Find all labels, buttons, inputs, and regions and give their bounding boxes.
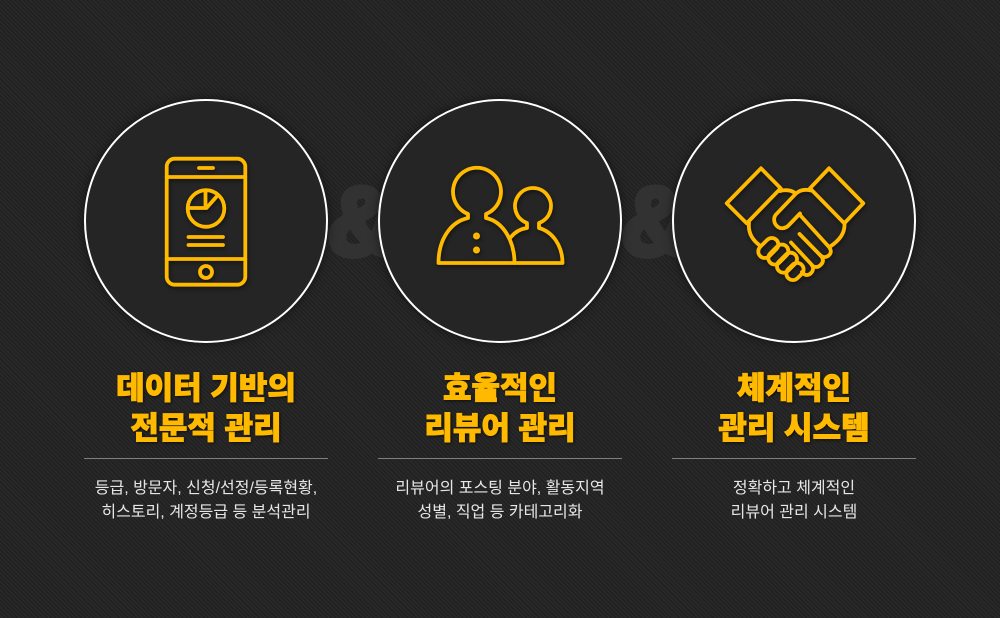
text: data based description: 등급, 방문자, 신청/선정/등록현황,	[95, 480, 317, 497]
panel: data based	[84, 371, 328, 521]
text: efficient review description: 성별, 직업 등 카테고리화	[418, 504, 582, 521]
heading: data based: 데이터 기반의	[116, 371, 296, 406]
heading: systematic	[718, 371, 870, 446]
ampersand: second: &	[621, 167, 691, 276]
circle: phone icon	[84, 99, 328, 343]
heading: systematic: 체계적인	[737, 371, 851, 406]
heading: systematic: 관리 시스템	[718, 411, 870, 446]
ampersand: first: &	[327, 167, 397, 276]
icon: phone with pie chart	[164, 156, 248, 289]
circle: handshake icon	[672, 99, 916, 343]
text: systematic description: 정확하고 체계적인	[733, 480, 855, 497]
text: systematic description: 리뷰어 관리 시스템	[731, 504, 857, 521]
text: data based description: 히스토리, 계정등급 등 분석관리	[101, 504, 311, 521]
text: data based description	[95, 480, 317, 521]
panel: efficient review	[378, 371, 622, 521]
text: systematic description	[731, 480, 857, 521]
heading: efficient review: 효율적인	[443, 371, 557, 406]
heading: data based: 전문적 관리	[130, 411, 282, 446]
text: efficient review description: 리뷰어의 포스팅 분야, 활동지역	[395, 480, 605, 497]
heading: data based	[116, 371, 296, 446]
text: efficient review description	[395, 479, 605, 521]
icon: two people	[436, 166, 566, 267]
icon: handshake	[724, 166, 866, 284]
heading: efficient review: 리뷰어 관리	[424, 411, 576, 446]
panel: systematic	[672, 371, 916, 521]
heading: efficient review	[424, 371, 576, 446]
circle: people icon	[378, 99, 622, 343]
